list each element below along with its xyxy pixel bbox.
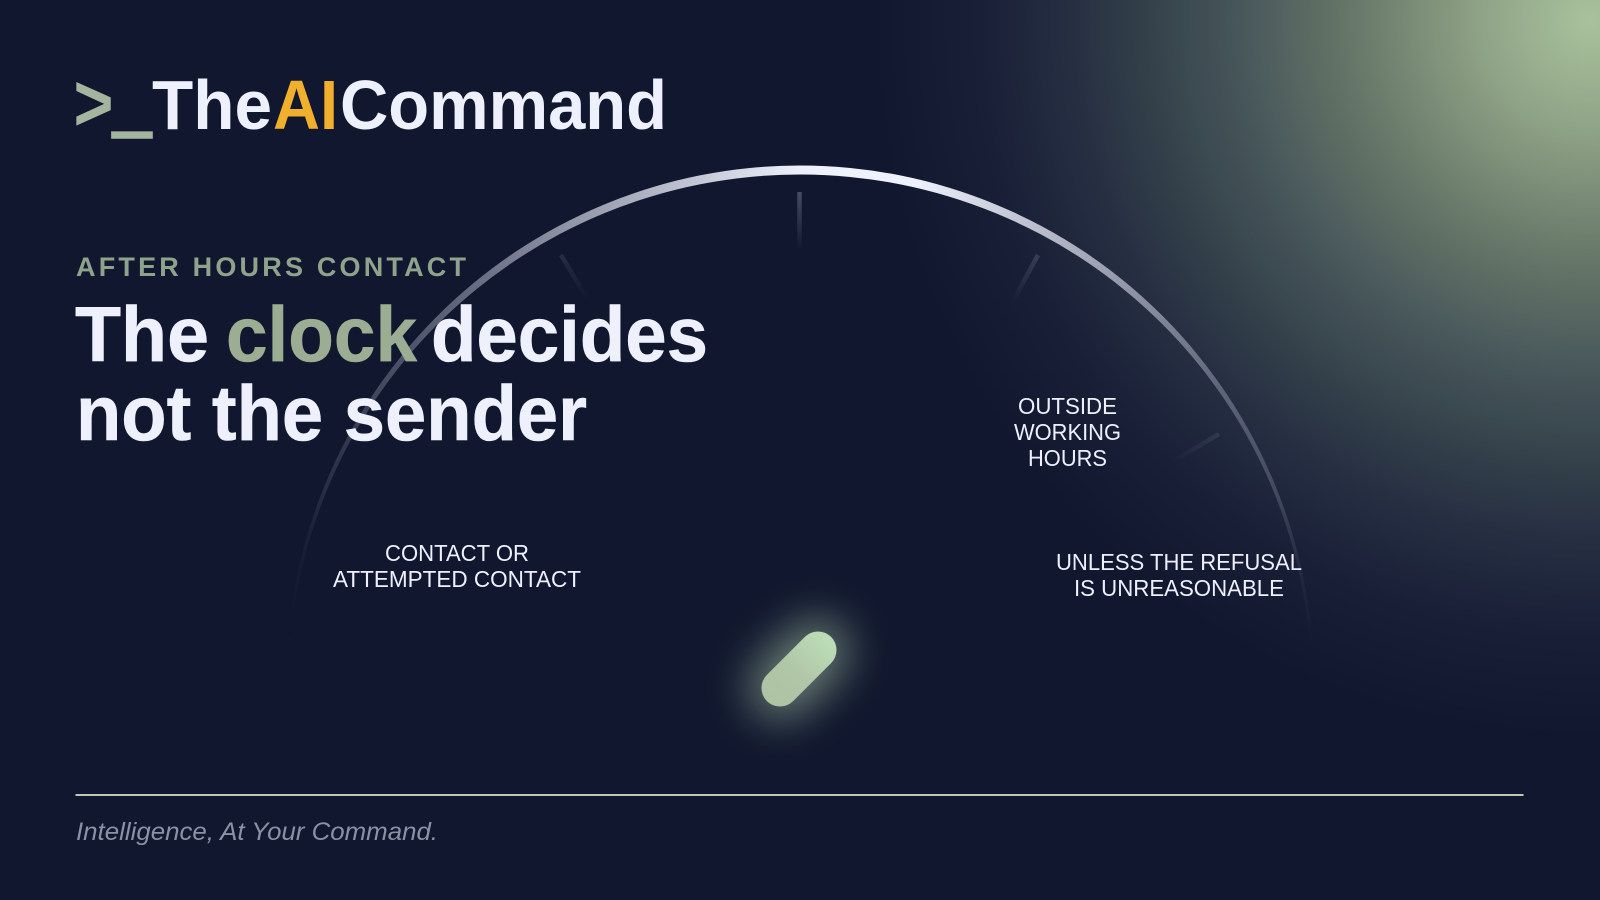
gauge arc — [302, 166, 1305, 590]
label: outside working hours: WORKING — [1014, 419, 1121, 445]
logo wordmark: AI — [273, 66, 338, 144]
label: contact or attempted contact: CONTACT OR — [385, 540, 529, 566]
logo prompt mark: > — [74, 58, 114, 148]
headline: decides — [431, 290, 708, 378]
gauge — [286, 166, 1314, 688]
logo wordmark: The — [152, 66, 272, 144]
headline: clock — [226, 290, 418, 378]
label: unless the refusal is unreasonable — [1056, 549, 1302, 601]
label: contact or attempted contact: ATTEMPTED CONTACT — [333, 566, 581, 592]
label: unless the refusal is unreasonable: IS UNREASONABLE — [1074, 575, 1284, 601]
label: unless the refusal is unreasonable: UNLESS THE REFUSAL — [1056, 549, 1302, 575]
logo — [74, 35, 667, 148]
logo wordmark: Command — [340, 66, 667, 144]
headline: not the sender — [76, 369, 587, 457]
label: contact or attempted contact — [333, 540, 581, 592]
label: outside working hours — [1014, 393, 1121, 471]
eyebrow: AFTER HOURS CONTACT — [76, 252, 466, 282]
corner glow — [860, 0, 1600, 745]
headline — [75, 290, 708, 457]
logo wordmark — [152, 66, 667, 144]
logo prompt mark — [74, 35, 152, 148]
headline: The — [75, 290, 209, 378]
needle pill with glow — [780, 650, 818, 688]
label: outside working hours: HOURS — [1028, 445, 1107, 471]
logo prompt mark: _ — [112, 35, 152, 147]
tagline: Intelligence, At Your Command. — [76, 818, 438, 846]
label: outside working hours: OUTSIDE — [1018, 393, 1117, 419]
tick marks — [561, 192, 1219, 462]
